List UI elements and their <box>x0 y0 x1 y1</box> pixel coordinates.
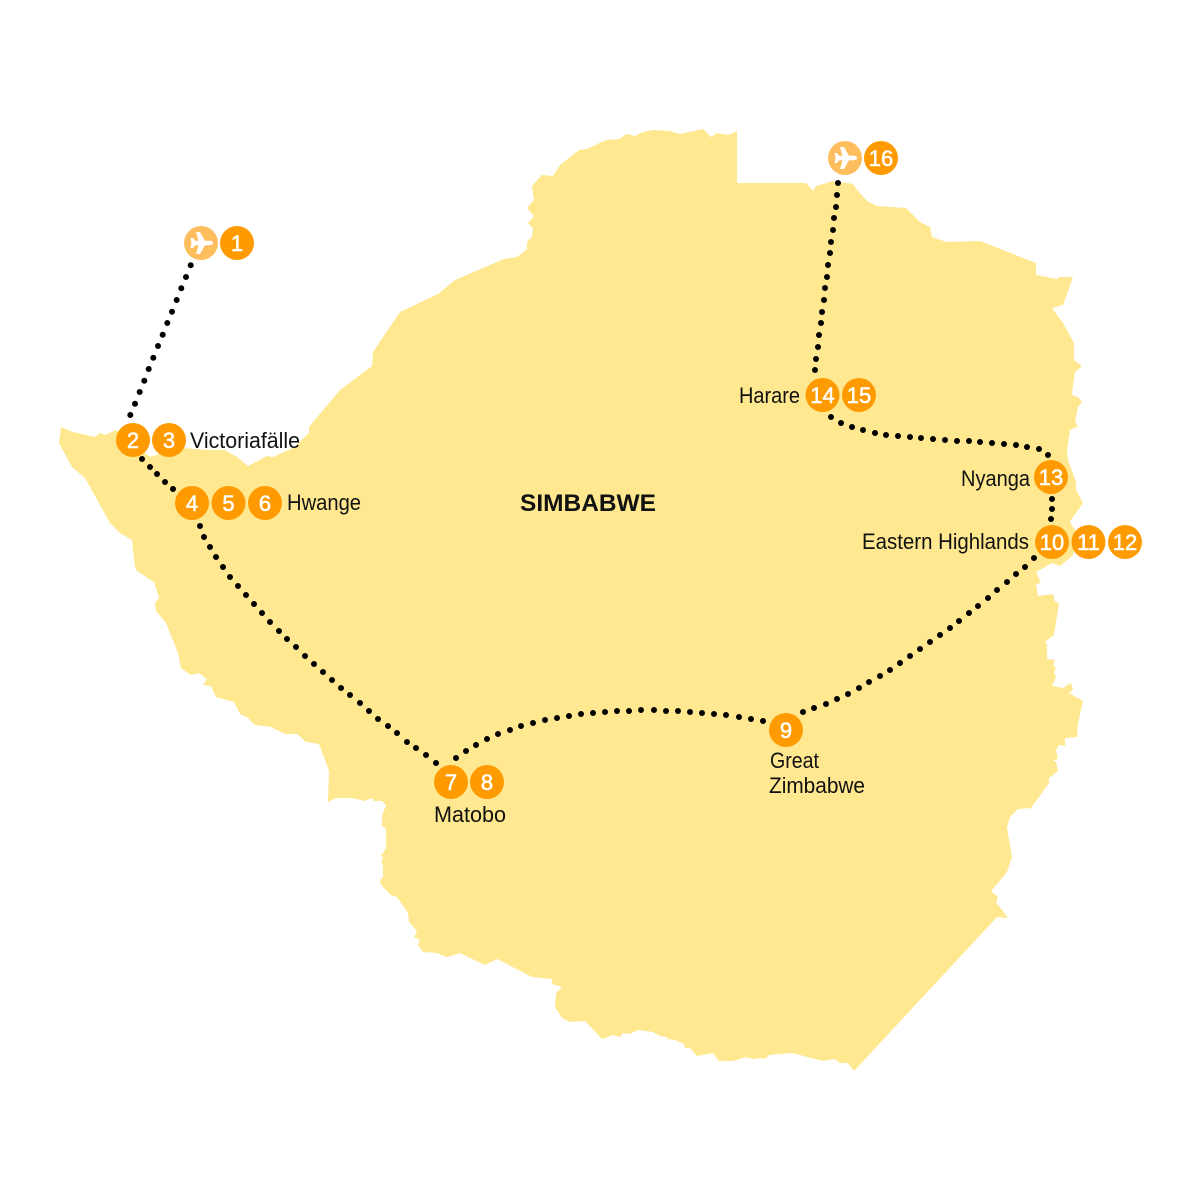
stop group: Eastern Highlands: 10 <box>1040 530 1064 555</box>
stop group: Victoriafälle: Victoriafälle <box>190 428 300 453</box>
stop group: Matobo <box>434 765 506 827</box>
stop group: Harare <box>739 378 876 412</box>
icon: departure plane <box>828 141 862 175</box>
stop group: Matobo: Matobo <box>434 802 506 827</box>
stop group: Hwange: 5 <box>222 491 235 516</box>
stop marker 1: 1 <box>231 231 243 256</box>
stop group: Great Zimbabwe: Great <box>770 748 819 773</box>
stop group: Victoriafälle <box>116 423 300 457</box>
stop marker 16 <box>864 141 898 175</box>
stop group: Nyanga: 13 <box>1039 465 1063 490</box>
stop marker 16: 16 <box>869 146 893 171</box>
stop group: Harare: 14 <box>810 383 835 408</box>
stop marker 1 <box>220 226 254 260</box>
stop group: Great Zimbabwe: Zimbabwe <box>769 773 865 798</box>
stop group: Eastern Highlands: 12 <box>1113 530 1137 555</box>
stop group: Hwange: 4 <box>186 491 198 516</box>
stop group: Harare: 15 <box>847 383 871 408</box>
heading: country name: SIMBABWE <box>520 490 656 517</box>
stop group: Eastern Highlands <box>862 525 1142 559</box>
stop group: Hwange: Hwange <box>287 490 361 515</box>
route: dotted travel line <box>130 183 1052 763</box>
stop group: Hwange <box>175 486 361 520</box>
stop group: Matobo: 7 <box>445 770 457 795</box>
stop group: Eastern Highlands: 11 <box>1077 530 1100 555</box>
stop group: Eastern Highlands: Eastern Highlands <box>862 529 1029 554</box>
stop group: Victoriafälle: 2 <box>127 428 139 453</box>
stop group: Great Zimbabwe: 9 <box>780 718 792 743</box>
stop group: Great Zimbabwe <box>769 713 865 798</box>
stop group: Nyanga: Nyanga <box>961 466 1031 491</box>
map: Zimbabwe outline <box>59 129 1083 1071</box>
stop group: Harare: Harare <box>739 383 800 408</box>
stop group: Victoriafälle: 3 <box>163 428 175 453</box>
stop group: Matobo: 8 <box>481 770 493 795</box>
icon: arrival plane <box>184 226 218 260</box>
stop group: Hwange: 6 <box>259 491 271 516</box>
stop group: Nyanga <box>961 460 1068 494</box>
